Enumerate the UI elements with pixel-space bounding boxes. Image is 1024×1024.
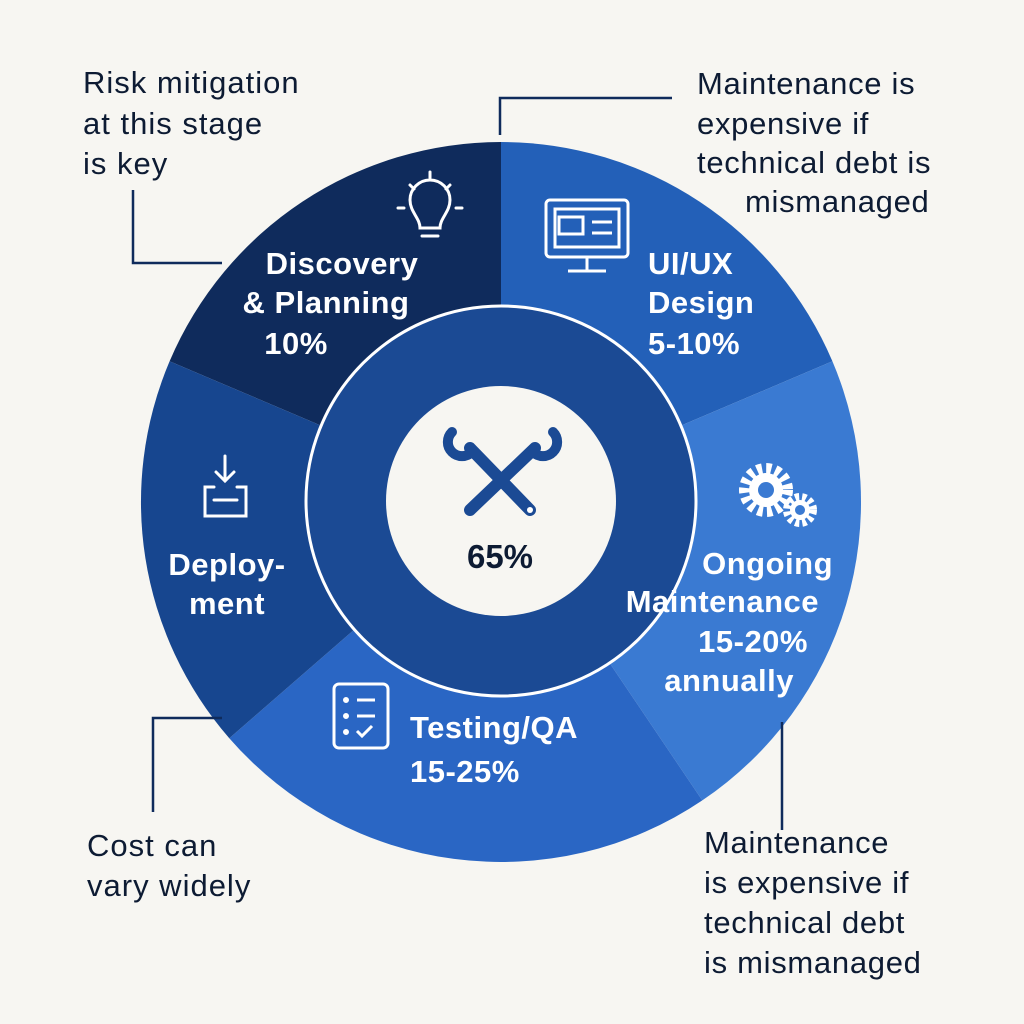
callout: maintenance top: expensive if bbox=[697, 106, 869, 141]
label: testing: Testing/QA bbox=[410, 710, 578, 745]
label: maintenance: Maintenance bbox=[626, 584, 819, 619]
center value: 65% bbox=[467, 538, 533, 575]
callout: maintenance bottom bbox=[704, 722, 922, 980]
icon: gears bbox=[745, 469, 813, 523]
icon: bulb bbox=[398, 172, 462, 236]
label: ui/ux bbox=[648, 246, 754, 361]
donut chart bbox=[141, 142, 861, 862]
label: maintenance: annually bbox=[664, 663, 794, 698]
callout: maintenance bottom: is mismanaged bbox=[704, 945, 922, 980]
center circle bbox=[386, 386, 616, 616]
segment: maintenance bbox=[501, 361, 861, 800]
label: discovery: & Planning bbox=[243, 285, 409, 320]
label: discovery: Discovery bbox=[266, 246, 419, 281]
callout: maintenance bottom: technical debt bbox=[704, 905, 905, 940]
callout: maintenance top: Maintenance is bbox=[697, 66, 915, 101]
icon: monitor bbox=[546, 200, 628, 271]
callout: maintenance top: mismanaged bbox=[745, 184, 929, 219]
callout: maintenance top: technical debt is bbox=[697, 145, 931, 180]
label: maintenance: 15-20% bbox=[698, 624, 808, 659]
callout: maintenance bottom: is expensive if bbox=[704, 865, 909, 900]
label: ui/ux: 5-10% bbox=[648, 326, 740, 361]
callout: cost: vary widely bbox=[87, 868, 251, 903]
callout: risk mitigation: Risk mitigation bbox=[83, 65, 300, 100]
icon: checklist bbox=[334, 684, 388, 748]
callout: risk mitigation bbox=[83, 65, 300, 263]
callout: cost bbox=[87, 718, 251, 903]
segment: discovery bbox=[170, 142, 501, 502]
label: maintenance: Ongoing bbox=[702, 546, 833, 581]
inner ring bbox=[306, 306, 696, 696]
label: maintenance bbox=[626, 546, 833, 698]
callout: maintenance bottom: Maintenance bbox=[704, 825, 889, 860]
callout: risk mitigation: at this stage bbox=[83, 106, 263, 141]
label: deployment: Deploy- bbox=[168, 547, 286, 582]
segment: testing bbox=[229, 502, 702, 862]
label: deployment: ment bbox=[189, 586, 265, 621]
segment: deployment bbox=[141, 361, 501, 738]
callout: maintenance top bbox=[500, 66, 931, 219]
label: testing: 15-25% bbox=[410, 754, 520, 789]
icon: deployment tray bbox=[205, 456, 246, 516]
callout: risk mitigation: is key bbox=[83, 146, 168, 181]
label: discovery: 10% bbox=[264, 326, 328, 361]
label: testing bbox=[410, 710, 578, 789]
segment: ui/ux bbox=[501, 142, 832, 502]
icon: wrench and screwdriver bbox=[448, 432, 557, 513]
label: deployment bbox=[168, 547, 286, 621]
label: discovery bbox=[243, 246, 419, 361]
callout: cost: Cost can bbox=[87, 828, 217, 863]
label: ui/ux: Design bbox=[648, 285, 754, 320]
label: ui/ux: UI/UX bbox=[648, 246, 733, 281]
